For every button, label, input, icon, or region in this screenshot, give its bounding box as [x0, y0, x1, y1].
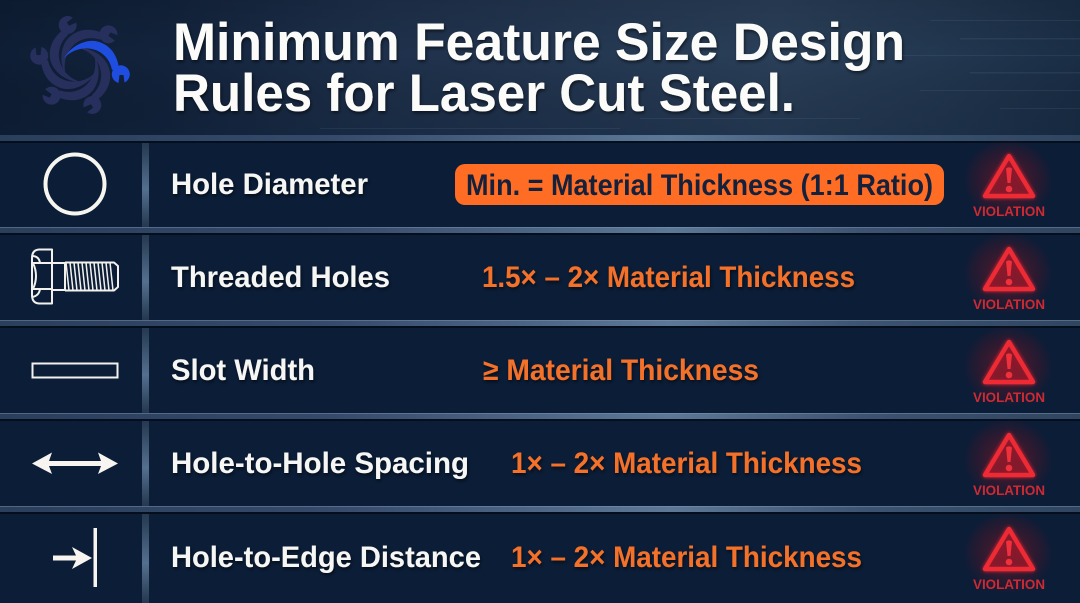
- row 1: hole diameter: [46, 138, 1054, 222]
- violation warning: VIOLATION: [973, 296, 1045, 312]
- row 4: hole-to-hole spacing: [32, 417, 1054, 501]
- label: hole-to-edge distance: Hole-to-Edge Distance: [171, 541, 481, 574]
- violation warning: VIOLATION: [973, 203, 1045, 219]
- row 5: hole-to-edge distance: [53, 511, 1054, 595]
- violation warning: VIOLATION: [973, 389, 1045, 405]
- violation warning: [962, 511, 1054, 595]
- icon column dividers: [142, 143, 149, 603]
- row separators: [0, 135, 1080, 514]
- label: hole-to-hole spacing: Hole-to-Hole Spacing: [171, 447, 469, 480]
- highlighted rule pill: Min. = Material Thickness (1:1 Ratio): [466, 169, 933, 202]
- rule value: 1× – 2× Material Thickness: [511, 541, 862, 574]
- rule value: 1× – 2× Material Thickness: [511, 447, 862, 480]
- violation warning: [962, 231, 1054, 315]
- icon: double arrow: [32, 452, 118, 474]
- label: hole diameter: Hole Diameter: [171, 168, 369, 201]
- violation warning: [962, 138, 1054, 222]
- icon: circle: [46, 154, 104, 214]
- violation warning: [962, 417, 1054, 501]
- violation warning: VIOLATION: [973, 482, 1045, 498]
- title: Minimum Feature Size Design: [173, 13, 905, 72]
- icon: slot: [32, 364, 118, 378]
- label: threaded holes: Threaded Holes: [171, 261, 390, 294]
- row 2: threaded holes: [32, 231, 1054, 315]
- icon: arrow to edge: [53, 528, 97, 587]
- label: slot width: Slot Width: [171, 354, 315, 387]
- header band: [0, 0, 1080, 136]
- violation warning: VIOLATION: [973, 576, 1045, 592]
- logo: wrench swirl: [30, 10, 130, 120]
- title: [173, 13, 905, 123]
- rule value: 1.5× – 2× Material Thickness: [482, 261, 855, 294]
- rule value: ≥ Material Thickness: [483, 354, 759, 387]
- violation warning: [962, 324, 1054, 408]
- title: Rules for Laser Cut Steel.: [173, 64, 795, 123]
- row 3: slot width: [32, 324, 1054, 408]
- icon: bolt: [32, 250, 118, 304]
